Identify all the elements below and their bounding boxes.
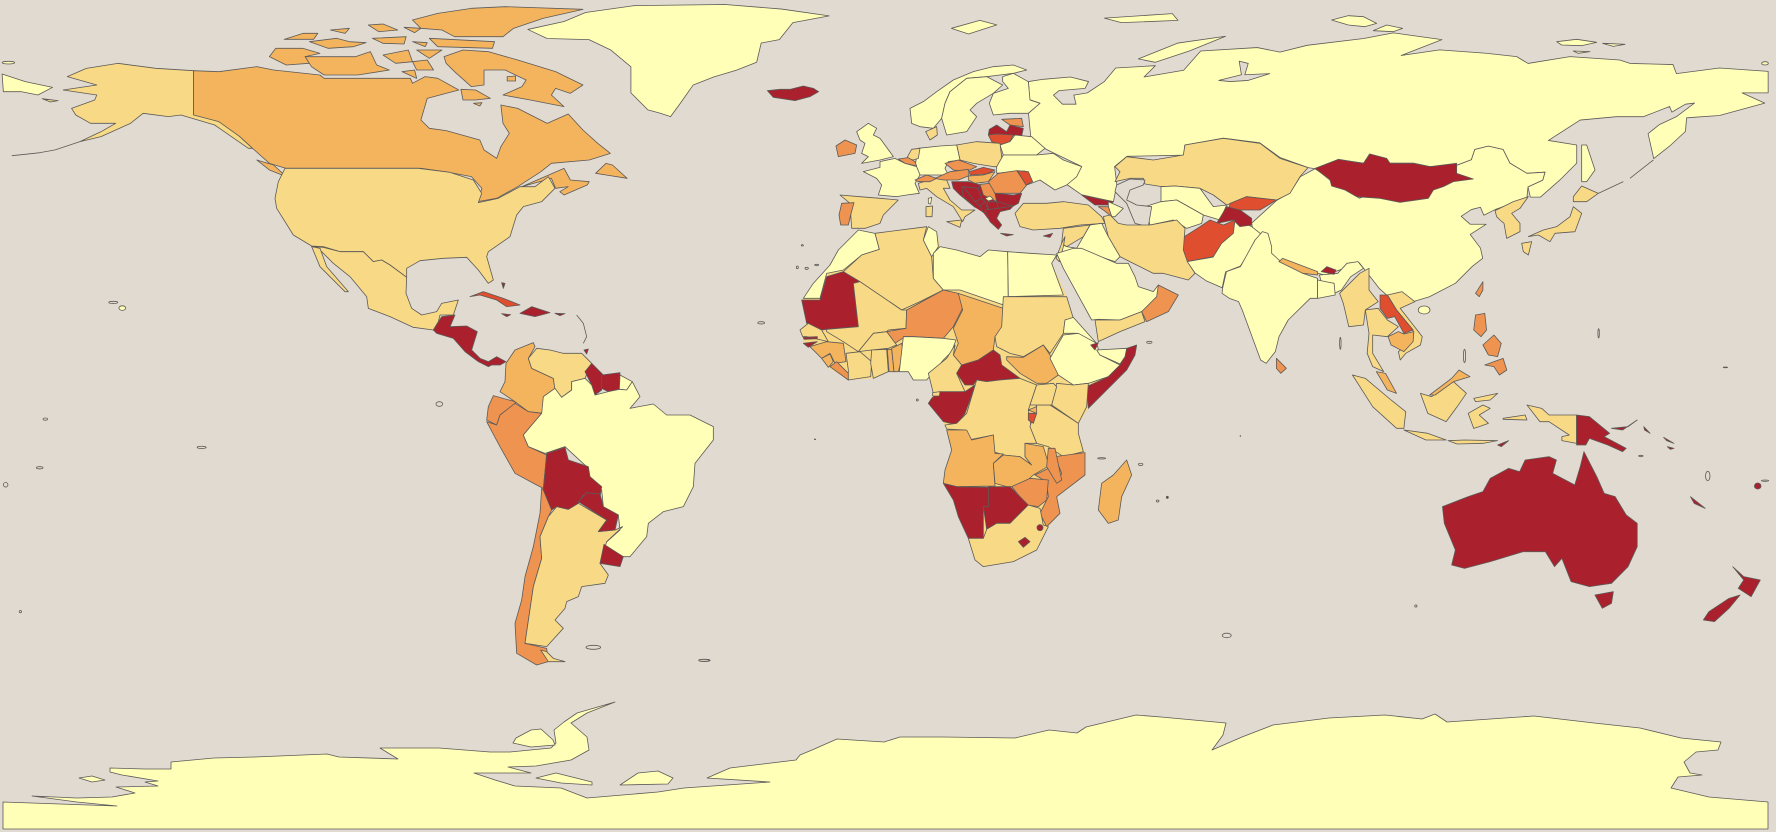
region: Antarctica (3, 702, 1768, 829)
Portugal (839, 203, 854, 225)
Galapagos (436, 402, 443, 406)
Saint Lawrence Island (42, 99, 58, 102)
Ob gulf (1219, 61, 1270, 82)
Pakistan (1187, 220, 1263, 288)
Thurston ice island (79, 776, 105, 782)
Ukraine (997, 153, 1082, 190)
Gabon and Congo (928, 385, 975, 425)
Canadian Arctic islands (269, 7, 583, 107)
Kalimantan (1420, 382, 1466, 422)
region: Central and South America (433, 315, 713, 665)
Chukotka tip (2, 74, 53, 95)
Sulawesi north arm (1474, 393, 1498, 402)
Bosnia (963, 187, 982, 202)
Ethiopia (1050, 333, 1120, 385)
Baja California (312, 247, 348, 292)
Kotelny Island (1603, 43, 1625, 46)
Germany (915, 145, 960, 175)
region: Africa and Arabia (796, 227, 1178, 567)
Kosovo (985, 196, 993, 201)
Bahamas (502, 283, 505, 288)
Sicily (947, 220, 962, 227)
Botswana (983, 487, 1028, 529)
Gambia (803, 337, 817, 339)
Ireland (836, 140, 857, 157)
Sierra Leone (822, 354, 833, 367)
Russia (1028, 33, 1768, 202)
Azerbaijan (1108, 202, 1123, 217)
Romania (988, 171, 1027, 193)
New Zealand South Island (1703, 595, 1740, 622)
Mexico (312, 247, 458, 330)
Madagascar (1098, 460, 1132, 523)
Kyrgyzstan (1228, 197, 1277, 213)
Sri Lanka (1276, 358, 1286, 373)
Lesser Sunda Islands (1448, 440, 1498, 444)
Balkan base fill (952, 182, 1013, 229)
South Sudan (1007, 345, 1058, 383)
Antarctica mainland (3, 702, 1768, 829)
Afghanistan (1182, 220, 1235, 262)
Turkmenistan (1145, 200, 1203, 228)
Albania (980, 202, 988, 213)
Hispaniola (520, 307, 550, 317)
Iraq (1077, 223, 1120, 262)
Malay Peninsula (1376, 372, 1397, 393)
Iran (1103, 215, 1195, 280)
Crete (1001, 233, 1013, 236)
Oman (1142, 285, 1178, 322)
Egypt (1008, 252, 1063, 297)
New Caledonia (1690, 497, 1705, 508)
New Siberian Islands (1557, 39, 1597, 46)
region: South and Southeast Asia and Oceania (1222, 232, 1769, 622)
DR Congo (945, 378, 1037, 465)
Argentina (525, 503, 623, 647)
small Pacific islands (3, 301, 1417, 661)
Uganda (1030, 383, 1057, 405)
Canada mainland (194, 67, 610, 202)
Taiwan (1476, 282, 1483, 297)
Nepal (1279, 258, 1318, 275)
Rwanda (1028, 407, 1037, 413)
Corsica (928, 197, 932, 204)
Ecuador (487, 396, 517, 425)
Greece (985, 206, 1013, 229)
New Britain (1611, 420, 1637, 430)
Lebanon and Israel (1056, 237, 1065, 262)
Belarus (1000, 135, 1045, 155)
Guyana (585, 363, 603, 395)
South Georgia (699, 659, 709, 661)
Uzbekistan (1161, 186, 1227, 220)
region: overview shapes (Greenland, Russia, Asia) (3, 5, 1768, 661)
Victoria Island (305, 52, 389, 75)
Vanuatu and small islands (1240, 329, 1769, 481)
Bhutan (1321, 267, 1336, 274)
Mongolia (1315, 154, 1473, 202)
Bolshevik Island (1373, 25, 1403, 32)
Yemen (1095, 312, 1145, 342)
USA (275, 168, 555, 283)
Mozambique (1035, 453, 1085, 527)
Java (1404, 430, 1446, 440)
Maluku (1503, 415, 1527, 420)
Korea (1495, 197, 1528, 238)
Sakhalin (1582, 145, 1595, 182)
Norway (910, 65, 1027, 128)
Filchner ice island (536, 773, 592, 785)
region: Alaska, Canada and Greenland detail (2, 7, 627, 202)
Laos (1380, 295, 1413, 333)
Algeria (843, 227, 943, 310)
Severnaya Zemlya (1332, 16, 1377, 27)
Australia (1442, 452, 1637, 587)
Spain (840, 195, 898, 228)
Benin (892, 343, 903, 372)
region: USA and Mexico (275, 168, 587, 343)
Zimbabwe (1012, 478, 1048, 507)
China (1252, 146, 1545, 306)
Africa base fill (800, 227, 1120, 567)
Moldova (1017, 171, 1033, 185)
Senegal (800, 323, 828, 342)
Tunisia (923, 227, 938, 257)
Brazil (523, 378, 713, 557)
Baffin Island (444, 50, 583, 107)
Fiji (1754, 483, 1761, 489)
Sulawesi (1468, 405, 1490, 428)
Georgia (1082, 195, 1113, 205)
Malawi (1047, 448, 1062, 483)
Sumatra (1352, 375, 1406, 428)
Cambodia (1388, 332, 1414, 352)
Central African Republic (957, 350, 1020, 385)
Bulgaria (995, 193, 1022, 206)
Italy (918, 178, 975, 222)
Vietnam (1387, 292, 1422, 360)
Wrangel Island (2, 61, 15, 64)
Jordan (1060, 245, 1077, 262)
Colombia (500, 343, 555, 413)
Namibia (943, 483, 988, 538)
Liberia (830, 362, 848, 380)
Lyakhovsky Island (1573, 51, 1590, 53)
Syria (1062, 225, 1090, 247)
Niger (887, 290, 963, 343)
French Guiana (619, 375, 632, 390)
Svalbard (951, 20, 997, 34)
Atlantic and Indian Ocean specks (796, 245, 1168, 502)
Sarawak and Sabah (1430, 370, 1470, 395)
Netherlands (907, 148, 920, 160)
Turkey (1015, 202, 1105, 230)
Poland (957, 142, 1003, 167)
UK (857, 123, 893, 163)
Armenia (1098, 207, 1112, 217)
Tanzania (1030, 405, 1083, 457)
Kyushu (1522, 242, 1532, 255)
Estonia (1002, 118, 1023, 127)
Paraguay (578, 493, 618, 532)
Burundi (1028, 413, 1037, 423)
Myanmar (1340, 268, 1378, 327)
Lesotho (1018, 537, 1030, 547)
Solomon Islands (1644, 427, 1674, 449)
Zambia (993, 443, 1048, 487)
Morocco and Western Sahara (803, 230, 879, 298)
Southampton Island (461, 89, 490, 100)
Lesser Antilles (577, 315, 587, 343)
Kenya (1052, 383, 1088, 423)
Novaya Zemlya (1138, 36, 1226, 62)
Hungary (968, 172, 995, 183)
Austria (935, 169, 968, 180)
Switzerland (915, 175, 937, 182)
Papua New Guinea (1577, 415, 1626, 452)
Peru (487, 403, 547, 488)
Eswatini (1037, 525, 1043, 531)
Hokkaido (1573, 186, 1598, 202)
Sudan (995, 297, 1073, 357)
Kuril Islands (1598, 160, 1653, 193)
Ghana (871, 349, 888, 378)
Equatorial Guinea (933, 392, 940, 396)
Iceland (767, 86, 819, 101)
region: Europe and Central Asia (767, 65, 1308, 280)
Caspian Sea (1115, 179, 1152, 227)
Philippines (1474, 313, 1507, 375)
Hainan (1418, 306, 1430, 314)
Greenland (528, 5, 829, 117)
Mauritania (802, 272, 860, 330)
North Macedonia (987, 202, 998, 210)
Tierra del Fuego (541, 650, 565, 662)
Jamaica (502, 314, 511, 317)
Djibouti (1091, 343, 1098, 350)
Newfoundland (596, 163, 627, 178)
Tasmania (1595, 592, 1613, 608)
Latvia (988, 125, 1023, 136)
Montenegro (975, 198, 985, 206)
Chile (515, 488, 552, 665)
Cyprus (1043, 233, 1053, 237)
New Brunswick and Nova Scotia (522, 168, 589, 195)
Chad (953, 293, 1003, 365)
Finland (989, 73, 1040, 115)
Ellesmere Island (412, 7, 583, 37)
Honshu (1528, 207, 1582, 242)
Togo (887, 349, 894, 372)
Venezuela (528, 348, 592, 397)
Trinidad (584, 349, 588, 354)
India (1222, 232, 1318, 363)
Thailand (1365, 308, 1398, 372)
Timor-Leste (1498, 441, 1509, 447)
Sardinia (926, 206, 933, 217)
Angola (943, 430, 1003, 487)
region: Central and Balkan Europe (915, 160, 1053, 237)
Denmark (926, 127, 937, 140)
Bay islands (474, 103, 482, 106)
Suriname (602, 373, 620, 392)
Northeast India (1319, 262, 1363, 293)
Queen Elizabeth Islands (284, 33, 318, 39)
Cote d'Ivoire (846, 352, 872, 380)
Belgium (898, 158, 917, 166)
region: East Asia detail (1315, 16, 1768, 255)
Central America (433, 315, 506, 367)
South Africa (968, 505, 1048, 567)
Nigeria (899, 337, 956, 380)
New Zealand North Island (1733, 567, 1760, 597)
Bolivia (543, 447, 602, 510)
Devon Island (429, 38, 495, 48)
Sweden (942, 77, 1003, 135)
Cuba (470, 292, 520, 307)
Serbia (980, 183, 997, 202)
Uruguay (600, 544, 623, 567)
Wrangel Island east part (1762, 62, 1768, 65)
Slovakia (969, 167, 995, 175)
Bangladesh (1318, 280, 1335, 298)
Somalia (1087, 345, 1137, 408)
Saudi Arabia (1057, 248, 1158, 320)
Lithuania (988, 134, 1013, 145)
Aleutian Islands (12, 142, 80, 156)
Tajikistan (1217, 207, 1252, 227)
France (863, 158, 920, 197)
Western New Guinea (1527, 405, 1577, 443)
Eritrea (1063, 317, 1097, 343)
Somaliland (1097, 348, 1127, 364)
Falkland Islands (586, 645, 601, 649)
Guinea (810, 342, 846, 363)
Puerto Rico (555, 313, 565, 316)
Alaska (63, 63, 253, 148)
Mali (827, 282, 907, 352)
Ronne ice island (620, 771, 673, 785)
Alexander Island (513, 729, 555, 747)
Burkina Faso (858, 332, 897, 352)
Slovenia and Croatia (952, 182, 980, 207)
Guinea-Bissau (803, 342, 817, 347)
Libya (933, 247, 1008, 307)
Prince of Wales and Somerset (383, 50, 412, 63)
Banks Island (269, 48, 320, 65)
Vancouver Island (257, 160, 286, 177)
Czechia (945, 160, 977, 172)
Kazakhstan (1115, 138, 1308, 205)
Cameroon (928, 345, 965, 393)
Franz Josef Land (1104, 14, 1178, 23)
